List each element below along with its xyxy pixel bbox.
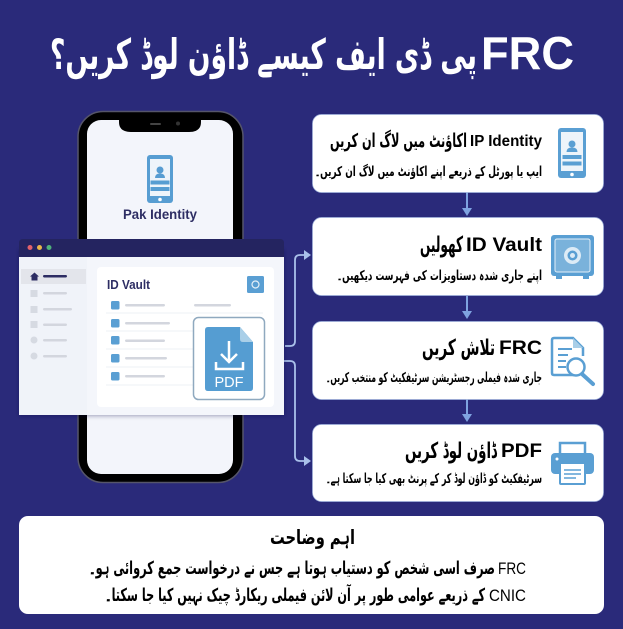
pdf download card: PDF: [214, 375, 244, 391]
icon: phone login: [558, 128, 586, 178]
arrow: pdf to download card: [265, 361, 311, 466]
arrow: step 1 to 2: [462, 192, 472, 216]
note line 1: FRC: [498, 560, 526, 578]
icon: safe: [551, 235, 594, 279]
icon: document search: [552, 338, 593, 384]
icon: pak identity phone: [147, 155, 173, 203]
heading: step 3: FRC: [499, 338, 542, 359]
heading: step 4: ڈاؤن لوڈ کریں: [405, 439, 498, 464]
note heading: اہم وضاحت: [270, 525, 355, 549]
sidebar: [19, 257, 87, 415]
panel: important note: [19, 516, 604, 614]
heading: step 1: IP Identity: [470, 133, 542, 150]
heading: step 2: کھولیں: [420, 233, 463, 258]
app name: Pak Identity: [123, 207, 197, 222]
id vault panel: ID Vault: [107, 277, 151, 292]
icon: small safe: [247, 276, 264, 293]
panel: step 4 download: [312, 424, 604, 502]
arrow: browser to id vault: [285, 250, 311, 346]
heading: step 4: PDF: [501, 441, 542, 462]
panel: step 2 id vault: [312, 218, 604, 296]
panel: step 1 login: [312, 114, 604, 192]
id vault panel: [97, 267, 274, 407]
arrow: step 2 to 3: [462, 296, 472, 319]
heading: step 2: [420, 233, 543, 258]
panel: step 3 search: [312, 322, 604, 400]
heading: step 3: تلاش کریں: [422, 336, 495, 361]
icon: printer: [551, 443, 594, 484]
heading: step 1: اکاؤنٹ میں لاگ ان کریں: [330, 129, 467, 152]
note line 2: CNIC: [489, 587, 526, 605]
browser window: [19, 239, 284, 415]
pdf download card: [194, 318, 264, 400]
arrow: step 3 to 4: [462, 399, 472, 422]
heading: step 2: ID Vault: [466, 235, 543, 256]
title: FRC: [481, 27, 574, 79]
phone: [78, 112, 243, 482]
